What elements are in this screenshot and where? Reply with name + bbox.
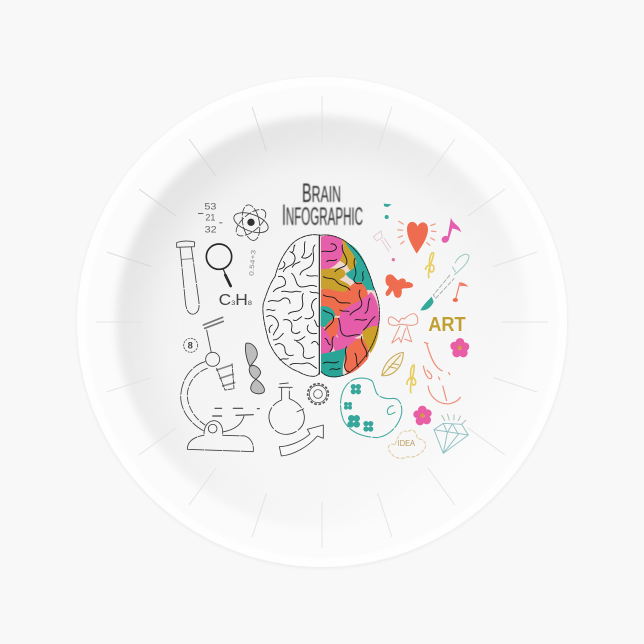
icon: small coin: 8	[188, 341, 193, 351]
icon: diamond with rays	[434, 414, 468, 453]
icon: yellow treble clef	[426, 253, 434, 278]
icon: red guitar sketch	[423, 342, 461, 404]
right hemisphere colour patches	[320, 235, 380, 377]
paper plate	[76, 77, 568, 569]
art doodles upper right	[373, 204, 469, 343]
art doodles lower right	[341, 338, 469, 458]
title: Brain Infographic: BRAIN	[302, 178, 341, 208]
icon: paint tool sketch	[373, 231, 395, 261]
icon: red music note	[453, 282, 468, 302]
ART lettering: ART	[428, 313, 466, 336]
icon: microscope	[181, 317, 259, 452]
C3H8 formula: C3H8	[219, 292, 252, 309]
icon: pink music note	[442, 218, 461, 243]
icon: gear	[308, 384, 328, 404]
icon: yellow treble clef small	[407, 365, 416, 393]
icon: heart with rays	[397, 221, 436, 254]
icon: artist palette	[341, 378, 402, 438]
icon: IDEA cloud: IDEA	[398, 438, 415, 448]
subtraction numbers	[198, 201, 222, 235]
icon: curved arrow	[279, 425, 323, 456]
teal dashes	[384, 204, 392, 219]
icon: atom	[231, 203, 271, 242]
left hemisphere folds	[267, 242, 318, 368]
subtraction numbers: 32	[205, 225, 217, 235]
title: Brain Infographic	[282, 178, 363, 232]
brain outline	[263, 235, 380, 377]
subtraction numbers: 21	[205, 213, 215, 223]
icon: test tube	[177, 241, 199, 314]
microscope and lab doodles	[181, 317, 328, 456]
small vertical formula: 0.54+3	[248, 249, 258, 276]
icon: magnifying glass	[206, 244, 232, 286]
product image: brain infographic paper plate: INFOGRAPHIC	[282, 199, 363, 232]
palette paint dabs	[344, 384, 373, 432]
icon: small coin	[184, 338, 198, 352]
brain illustration	[263, 235, 380, 377]
icon: bow	[388, 314, 418, 343]
icon: orange splat	[386, 274, 413, 298]
icon: round flask	[269, 383, 304, 434]
icon: paintbrush	[420, 254, 469, 310]
icon: DNA helix	[245, 343, 264, 394]
science doodles top left	[177, 201, 271, 314]
icon: pink flower bottom	[413, 406, 432, 425]
subtraction numbers: 53	[204, 201, 216, 211]
icon: pink flower top	[450, 338, 469, 357]
icon: leaf	[382, 352, 403, 376]
right hemisphere folds	[322, 244, 375, 372]
